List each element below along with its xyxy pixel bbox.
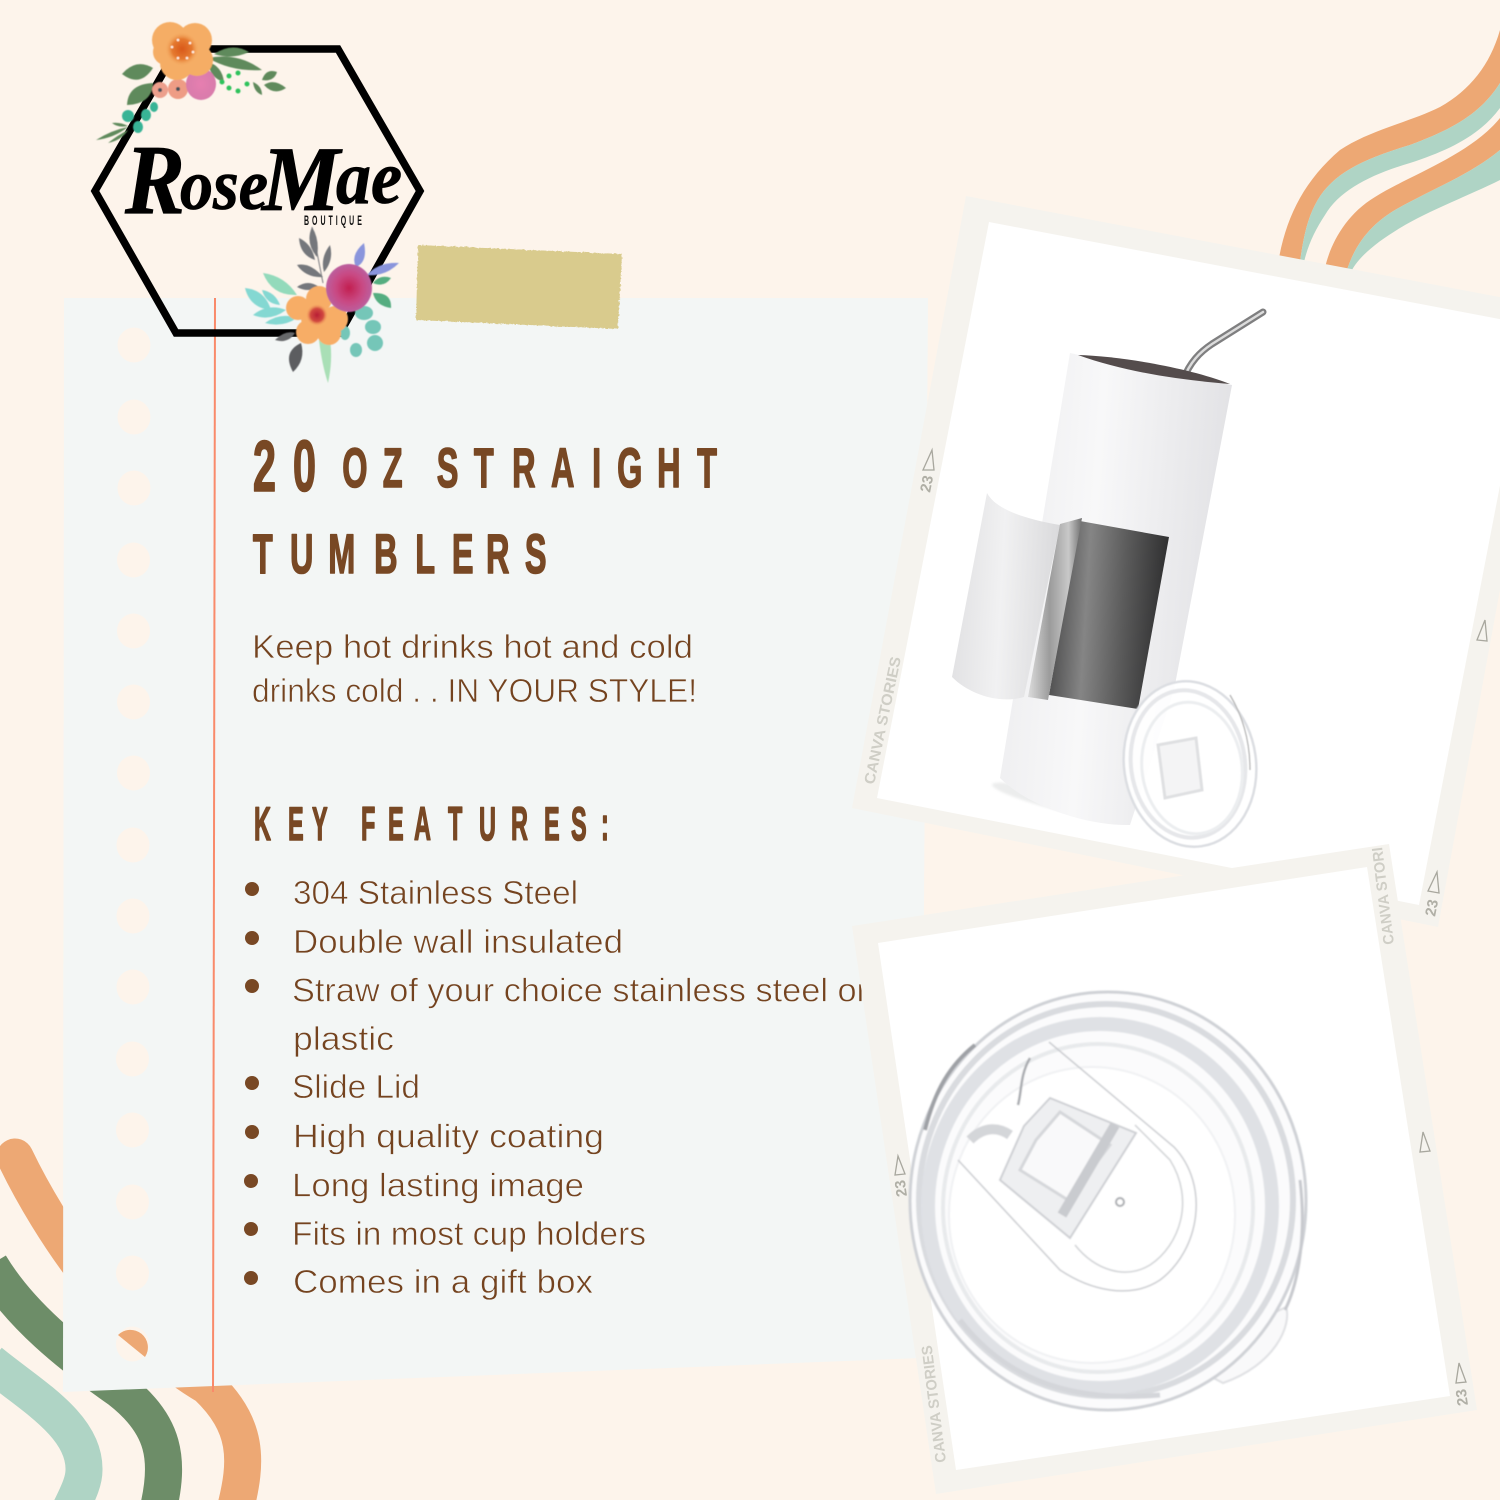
title [253, 427, 717, 585]
frame markings [861, 450, 1487, 918]
intro text [252, 628, 697, 709]
title: TUMBLERS [253, 523, 547, 585]
list text: Fits in most cup holders [292, 1215, 646, 1252]
cast shadow [990, 777, 1110, 823]
bullets [244, 882, 259, 1285]
list text: Slide Lid [292, 1068, 420, 1105]
frame markings: 23 [917, 474, 937, 494]
slide mechanism [1000, 1098, 1136, 1238]
lid tab [1180, 1307, 1287, 1383]
list text: Long lasting image [292, 1166, 584, 1204]
bottom bouquet [245, 227, 399, 383]
intro text: drinks cold . . IN YOUR STYLE! [252, 672, 697, 709]
logo wordmark: ae [336, 136, 402, 220]
logo wordmark: ose [180, 145, 268, 225]
frame markings: 23 [1422, 898, 1442, 918]
list text: 304 Stainless Steel [293, 874, 578, 911]
decorative waves: bottom left [0, 1157, 243, 1500]
straw [1183, 312, 1263, 380]
frame markings: CANVA STORI [1369, 846, 1398, 946]
frame markings: 23 [1453, 1388, 1472, 1407]
list text: Double wall insulated [293, 923, 623, 960]
photo frame: slide lid [852, 844, 1477, 1494]
logo subtitle: BOUTIQUE [304, 214, 365, 229]
list text: High quality coating [293, 1118, 604, 1154]
tumbler illustration [952, 312, 1267, 855]
logo wordmark: R [124, 124, 185, 235]
intro text: Keep hot drinks hot and cold [252, 628, 693, 665]
logo: RoseMae Boutique [95, 22, 420, 383]
top floral spray [96, 22, 286, 143]
photo area [878, 867, 1450, 1470]
frame border [852, 844, 1477, 1494]
photo area [877, 222, 1500, 905]
metal fold [1028, 518, 1082, 700]
rim opening [1078, 355, 1230, 384]
frame markings: CANVA STORIES [919, 1344, 950, 1464]
panel: notebook paper [63, 298, 928, 1392]
window [1049, 521, 1169, 709]
logo wordmark: M [260, 128, 343, 230]
list text: Straw of your choice stainless steel or [292, 972, 868, 1008]
orange showing through last hole [118, 1330, 148, 1357]
logo hexagon [95, 49, 420, 333]
heading: key features: KEYFEATURES: [254, 797, 609, 850]
list text [292, 874, 868, 1300]
list text: plastic [293, 1020, 394, 1057]
frame border [852, 196, 1500, 927]
frame markings: CANVA STORIES [861, 655, 905, 786]
slot outline [958, 1042, 1196, 1291]
large lid illustration [910, 992, 1306, 1410]
feature list [244, 874, 868, 1300]
lid rings [910, 992, 1306, 1410]
tumbler lid [1113, 673, 1267, 855]
margin line [213, 298, 215, 1392]
punched holes [116, 328, 150, 1362]
decorative waves: top right [1279, 30, 1500, 270]
title: 20 [253, 427, 316, 507]
list text: Comes in a gift box [293, 1263, 594, 1300]
frame markings [892, 846, 1472, 1464]
title: OZSTRAIGHT [342, 437, 717, 499]
tumbler body [1000, 353, 1232, 825]
logo wordmark [124, 124, 402, 235]
peeled panel [952, 493, 1060, 699]
frame markings: 23 [892, 1179, 911, 1198]
tape [416, 245, 622, 329]
photo frame: tumbler [852, 196, 1500, 927]
